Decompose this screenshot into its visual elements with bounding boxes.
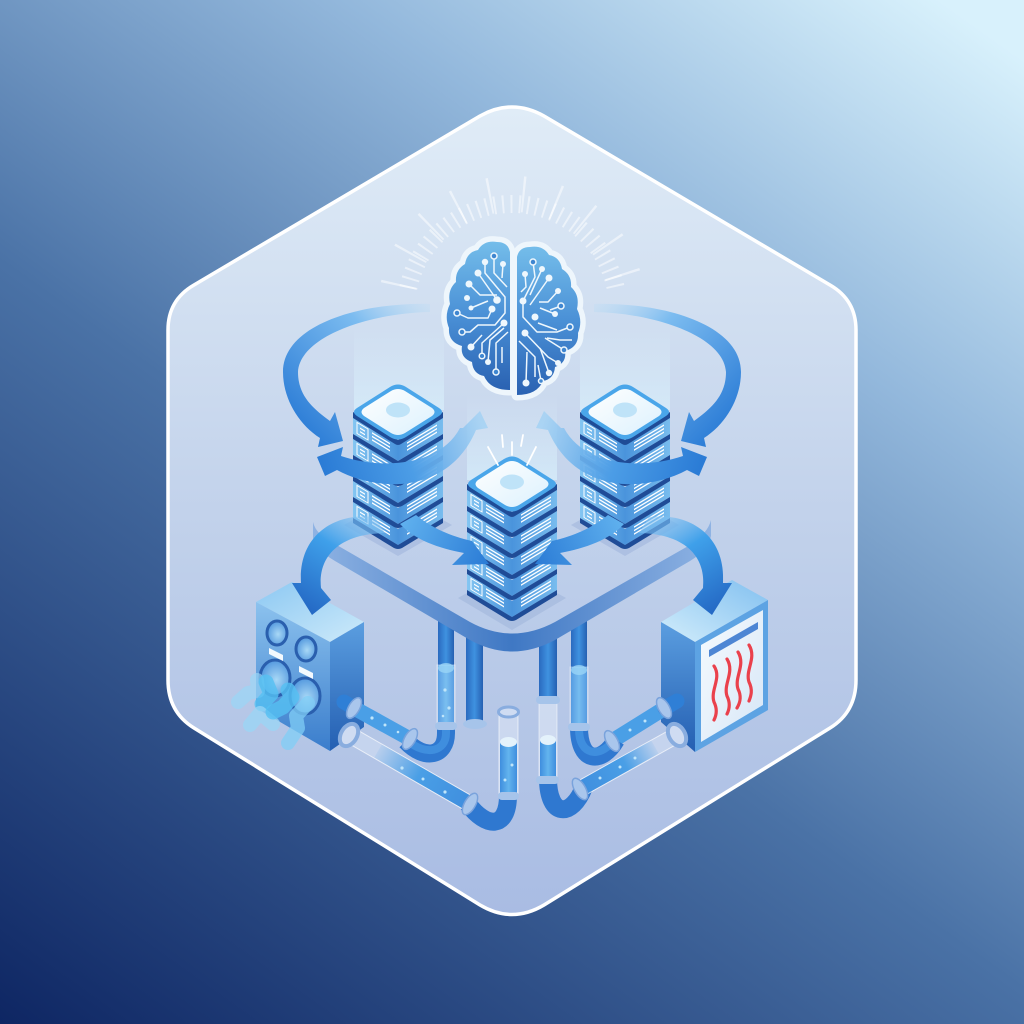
panel bar — [709, 622, 758, 657]
hexagon panel — [168, 107, 856, 914]
pipes and tubes: right loop — [536, 618, 690, 809]
brain icon — [447, 242, 580, 395]
server rack, center — [467, 456, 557, 621]
light beams above servers — [354, 325, 670, 480]
pipe: glass column center — [498, 707, 519, 800]
server rack, left — [353, 384, 443, 549]
arrow: left rack to brain, double ended — [317, 411, 488, 484]
circuit nodes — [464, 259, 561, 386]
dials — [260, 621, 320, 714]
arrow: brain to right rack — [594, 304, 741, 447]
water vapour at cooling unit — [238, 680, 308, 743]
brain hemispheres — [447, 242, 580, 395]
heat panel — [701, 610, 763, 742]
pipes and tubes: left loop — [336, 618, 519, 822]
arrow: racks down to cooling unit — [292, 516, 385, 615]
arrow: left rack to center rack — [400, 515, 489, 565]
radiating ticks above the brain — [398, 194, 626, 288]
server rack, right — [580, 384, 670, 549]
pipe: glass tube, lower right — [569, 721, 690, 802]
heat unit, right — [661, 580, 768, 752]
circuit traces — [457, 256, 572, 383]
sparks above center rack — [488, 435, 536, 465]
pipe: glass tube, lower left — [336, 721, 508, 822]
arrow: right rack to brain, double ended — [536, 411, 707, 484]
heat waves — [713, 645, 752, 720]
platform — [313, 420, 711, 652]
brain halo — [447, 242, 580, 395]
pipe: vertical and tube to heat unit, upper — [568, 618, 677, 757]
pipe: vertical with glass section center right — [536, 635, 584, 809]
pipe: vertical supply left — [437, 618, 455, 725]
arrow: right rack to center rack — [535, 515, 624, 565]
indicator labels — [269, 648, 313, 679]
pipe: elbow and tube to cooler, upper — [343, 695, 457, 753]
arrow: racks down to heat unit — [639, 516, 732, 615]
cooling unit, left — [256, 582, 364, 751]
pipe: vertical return left — [463, 628, 487, 729]
arrow: brain to left rack — [283, 304, 430, 447]
circuit ring nodes — [454, 253, 573, 384]
